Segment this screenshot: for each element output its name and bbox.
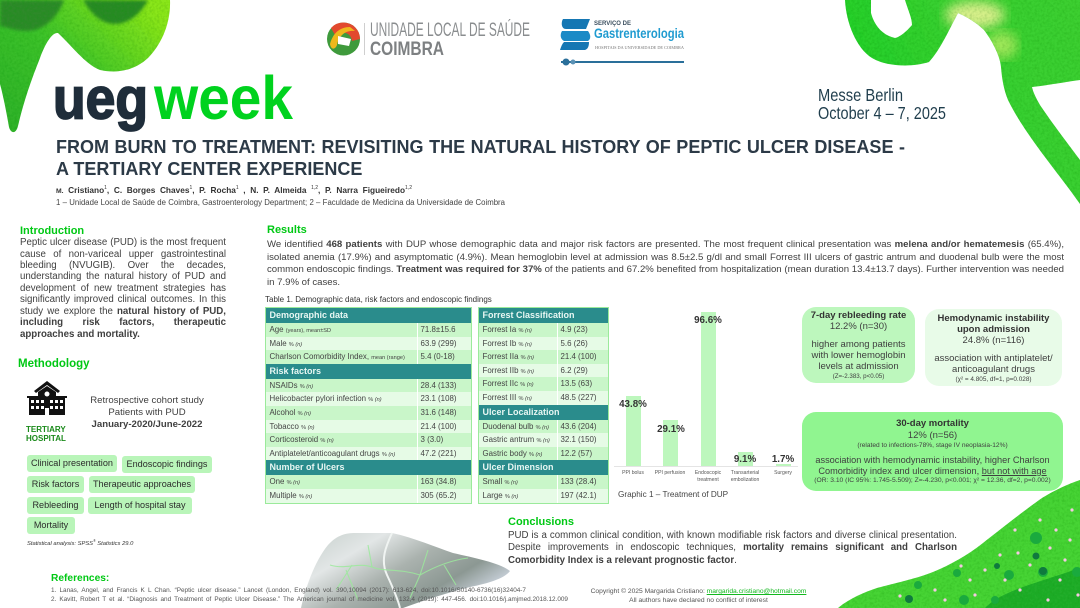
table: demographics, risk factors, number of ulcers: Multiple % (n) xyxy=(270,491,312,500)
table: forrest classification, ulcer localization, ulcer dimension: Forrest Classification xyxy=(482,310,575,320)
table: demographics, risk factors, number of ulcers: Antiplatelet/anticoagulant drugs % (n) xyxy=(270,449,395,458)
text: tertiary hospital xyxy=(26,425,66,443)
text: introduction body: cause of non-variceal upper gastrointestinal xyxy=(20,249,226,260)
axis labels: Transarterial xyxy=(731,470,759,476)
logo: Unidade Local de Saúde Coimbra: COIMBRA xyxy=(370,38,444,60)
text: introduction body: approaches and mortality. xyxy=(20,329,140,340)
axis labels xyxy=(622,470,792,483)
variable tags xyxy=(27,455,212,534)
value labels: 43.8% xyxy=(619,399,647,410)
axis labels: Endoscopic xyxy=(695,470,721,476)
text: study design: Patients with PUD xyxy=(108,407,186,418)
table: demographics, risk factors, number of ulcers: Male % (n) xyxy=(270,339,302,348)
table: demographics, risk factors, number of ulcers: 63.9 (299) xyxy=(420,339,456,348)
table: demographics, risk factors, number of ulcers: 21.4 (100) xyxy=(420,422,456,431)
venue and date xyxy=(818,85,946,123)
table: demographics, risk factors, number of ulcers: 305 (65.2) xyxy=(420,491,456,500)
decorative artwork: bottom-right green tissue xyxy=(838,480,1080,608)
table: forrest classification, ulcer localization, ulcer dimension: Forrest IIc % (n) xyxy=(482,379,534,388)
logo: ueg week: ueg xyxy=(53,66,148,132)
callout: 30-day mortality: 12% (n=56) xyxy=(908,430,957,441)
text: results body xyxy=(267,238,1064,288)
table: forrest classification, ulcer localization, ulcer dimension: Duodenal bulb % (n) xyxy=(482,422,549,431)
table: demographics, risk factors, number of ulcers: 163 (34.8) xyxy=(420,477,456,486)
callout: hemodynamic instability xyxy=(925,309,1062,386)
heading: conclusions: Conclusions xyxy=(508,516,574,528)
variable tags: Mortality xyxy=(34,520,68,530)
callout: 7-day rebleeding rate xyxy=(802,307,915,383)
text: statistical analysis: Statistical analysis: SPSS® Statistics 29.0 xyxy=(27,539,133,547)
table: demographics, risk factors, number of ulcers: 71.8±15.6 xyxy=(420,325,456,334)
table: demographics, risk factors, number of ulcers: 47.2 (221) xyxy=(420,449,456,458)
bar: PPI bolus xyxy=(626,396,640,466)
text: introduction body: understanding the natural history of PUD and xyxy=(20,271,226,282)
table: forrest classification, ulcer localization, ulcer dimension: Forrest IIa % (n) xyxy=(482,352,534,361)
table: forrest classification, ulcer localization, ulcer dimension: 197 (42.1) xyxy=(560,491,596,500)
table: demographics, risk factors, number of ulcers: Number of Ulcers xyxy=(270,462,345,472)
logo: ueg week xyxy=(53,66,293,132)
callout: 30-day mortality: association with hemodynamic instability, higher Charlson xyxy=(815,455,1050,465)
table: forrest classification, ulcer localization, ulcer dimension: 43.6 (204) xyxy=(560,422,596,431)
callout: 30-day mortality xyxy=(802,412,1063,491)
table: demographics, risk factors, number of ulcers: 23.1 (108) xyxy=(420,394,456,403)
axis labels: PPI perfusion xyxy=(655,470,685,476)
callout: hemodynamic instability: upon admission xyxy=(957,324,1030,335)
callout: 30-day mortality: (related to infections-78%, stage IV neoplasia-12%) xyxy=(857,442,1008,448)
table: demographics, risk factors, number of ulcers: Risk factors xyxy=(270,366,321,376)
axis labels: Surgery xyxy=(774,470,792,476)
heading: introduction: Introduction xyxy=(20,225,84,237)
table: demographics, risk factors, number of ulcers xyxy=(265,307,472,504)
text: introduction body: study we explore the natural history of PUD, xyxy=(20,306,226,317)
axis labels: treatment xyxy=(697,477,719,483)
table: forrest classification, ulcer localization, ulcer dimension: Forrest IIb % (n) xyxy=(482,366,534,375)
table: forrest classification, ulcer localization, ulcer dimension: 4.9 (23) xyxy=(560,325,588,334)
logo: Serviço de Gastrenterologia xyxy=(560,19,684,66)
text: study design: January-2020/June-2022 xyxy=(92,419,202,430)
table: demographics, risk factors, number of ulcers: Alcohol % (n) xyxy=(270,408,311,417)
table: forrest classification, ulcer localization, ulcer dimension: 6.2 (29) xyxy=(560,366,588,375)
table: demographics, risk factors, number of ulcers: One % (n) xyxy=(270,477,300,486)
bar: endoscopic treatment xyxy=(701,312,716,466)
panel: references xyxy=(51,573,568,603)
table: forrest classification, ulcer localization, ulcer dimension: 12.2 (57) xyxy=(560,449,592,458)
text: conclusions body: Comorbidity Index is a relevant prognostic factor. xyxy=(508,555,737,566)
heading: methodology: Methodology xyxy=(18,358,90,370)
decorative artwork: top-right green organ xyxy=(845,0,1080,204)
callout: 30-day mortality: (OR: 3.10 (IC 95%: 1.745-5.509); Z=-4.230, p<0.001; χ² = 12.36, df=2, p=0.002) xyxy=(814,477,1051,484)
value labels xyxy=(619,315,794,464)
value labels: 9.1% xyxy=(734,454,756,464)
copyright note: Copyright © 2025 Margarida Cristiano: margarida.cristiano@hotmail.com xyxy=(591,588,806,595)
chart: treatment of DUP xyxy=(614,312,798,499)
table: demographics, risk factors, number of ulcers: Tobacco % (n) xyxy=(270,422,314,431)
callout: hemodynamic instability: association with antiplatelet/ xyxy=(934,353,1053,364)
callout: 7-day rebleeding rate: higher among patients xyxy=(811,339,906,350)
table: forrest classification, ulcer localization, ulcer dimension: Forrest Ia % (n) xyxy=(482,325,532,334)
callout: hemodynamic instability: Hemodynamic instability xyxy=(938,313,1049,324)
text: results body: in 7.9% of cases. xyxy=(267,276,340,288)
table: forrest classification, ulcer localization, ulcer dimension: Forrest III % (n) xyxy=(482,393,532,402)
venue and date: Messe Berlin xyxy=(818,85,903,105)
affiliations: 1 – Unidade Local de Saúde de Coimbra, Gastroenterology Department; 2 – Faculdade de Medicina da Universidade de Coimbra xyxy=(56,198,505,207)
text: reference list xyxy=(51,587,568,603)
bar: PPI perfusion xyxy=(663,420,678,466)
table: forrest classification, ulcer localization, ulcer dimension: Small % (n) xyxy=(482,477,518,486)
text: conclusions body: Despite improvements in endoscopic techniques, mortality remains significant and Charlson xyxy=(508,542,957,553)
text: study design xyxy=(90,395,204,430)
decorative artwork: top-left green organ xyxy=(0,0,170,132)
logo: Serviço de Gastrenterologia: SERVIÇO DE xyxy=(594,20,632,27)
variable tags: Therapeutic approaches xyxy=(93,479,191,489)
callout: 30-day mortality: Comorbidity index and ulcer dimension, but not with age xyxy=(818,466,1047,476)
callout: 30-day mortality: 30-day mortality xyxy=(896,418,969,429)
table: forrest classification, ulcer localization, ulcer dimension: 5.6 (26) xyxy=(560,339,588,348)
value labels: 1.7% xyxy=(772,454,794,464)
text: introduction body xyxy=(20,237,226,340)
text: results body: We identified 468 patients with DUP whose demographic data and major risk factors are presented. The most frequent clinical presentation was melena and/or hematemesis (65.4%), xyxy=(267,238,1064,250)
heading: references: References: xyxy=(51,573,109,584)
table: forrest classification, ulcer localization, ulcer dimension: Ulcer Dimension xyxy=(482,462,554,472)
text: introduction body: including risk factors, therapeutic xyxy=(20,317,226,328)
table: forrest classification, ulcer localization, ulcer dimension: 21.4 (100) xyxy=(560,352,596,361)
text: introduction body: significantly improved clinical outcomes. In this xyxy=(20,294,226,305)
panel: conclusions xyxy=(508,516,957,566)
chart caption: Graphic 1 – Treatment of DUP xyxy=(618,490,728,499)
text: results body: common endoscopic findings. Treatment was required for 37% of the patients and 67.2% benefited from hospitalization (mean duration 13.4±13.7 days). Further intervention was needed xyxy=(267,264,1064,275)
callout: hemodynamic instability: 24.8% (n=116) xyxy=(963,335,1024,346)
panel: results text xyxy=(267,224,1064,288)
text: conclusions body: PUD is a common clinical condition, with known modifiable risk factors and diverse clinical presentation. xyxy=(508,530,957,541)
table: demographics, risk factors, number of ulcers: Helicobacter pylori infection % (n) xyxy=(270,394,382,403)
callout: hemodynamic instability: (χ² = 4.805, df=1, p=0.028) xyxy=(955,376,1032,383)
table: demographics, risk factors, number of ulcers: Corticosteroid % (n) xyxy=(270,435,334,444)
table: demographics, risk factors, number of ulcers: Demographic data xyxy=(270,310,348,320)
panel: methodology xyxy=(18,358,212,547)
text: introduction body: development of new treatment strategies has xyxy=(20,283,226,294)
text: conclusions body xyxy=(508,530,957,566)
table: demographics, risk factors, number of ulcers: NSAIDs % (n) xyxy=(270,381,313,390)
table: demographics, risk factors, number of ulcers: Age (years), mean±SD xyxy=(270,325,331,334)
value labels: 29.1% xyxy=(657,424,685,435)
table: demographics, risk factors, number of ulcers: 3 (3.0) xyxy=(420,435,443,444)
table: forrest classification, ulcer localization, ulcer dimension: Large % (n) xyxy=(482,491,518,500)
title: A TERTIARY CENTER EXPERIENCE xyxy=(56,159,362,179)
icon: hospital xyxy=(27,381,67,415)
title: FROM BURN TO TREATMENT: REVISITING THE NATURAL HISTORY OF PEPTIC ULCER DISEASE - xyxy=(56,137,905,157)
authors: M. Cristiano1, C. Borges Chaves1, P. Rocha1 , N. P. Almeida 1,2, P. Narra Figueiredo1,2 xyxy=(56,185,412,195)
axis labels: PPI bolus xyxy=(622,470,644,476)
text: reference list: 2. Kavitt, Robert T et al. “Diagnosis and Treatment of Peptic Ulcer Disease.” The American journal of medicine vol. 132,4 (2019): 447-456. doi:10.1016/j.amjmed.2018.12.009 xyxy=(51,596,568,603)
table: forrest classification, ulcer localization, ulcer dimension xyxy=(478,307,609,504)
table: forrest classification, ulcer localization, ulcer dimension: Gastric body % (n) xyxy=(482,449,542,458)
text: reference list: 1. Lanas, Angel, and Francis K L Chan. “Peptic ulcer disease.” Lancet (London, England) vol. 390,10094 (2017): 613-624, doi:10.1016/S0140-6736(16)32404-7 xyxy=(51,587,526,594)
logo: Unidade Local de Saúde Coimbra xyxy=(327,19,530,60)
callout: 7-day rebleeding rate: 7-day rebleeding rate xyxy=(811,310,906,321)
table: forrest classification, ulcer localization, ulcer dimension: 13.5 (63) xyxy=(560,379,592,388)
text: introduction body: bleeding (NVUGIB). Over the decades, xyxy=(20,260,226,271)
table: demographics, risk factors, number of ulcers: Charlson Comorbidity Index, mean (range) xyxy=(270,352,405,361)
copyright note xyxy=(591,588,806,604)
bar: surgery xyxy=(776,464,790,466)
bar: transarterial embolization xyxy=(738,452,752,466)
decorative artwork: liver xyxy=(301,532,510,608)
text: results body: isolated anemia (17.9%) and asymptomatic (4.9%). Mean hemoglobin level at admission was 8.5±2.5 g/dl and small Forrest III ulcers of gastric antrum and duodenal bulb were the most xyxy=(267,252,1064,262)
callout: 7-day rebleeding rate: 12.2% (n=30) xyxy=(830,321,887,332)
table: forrest classification, ulcer localization, ulcer dimension: Forrest Ib % (n) xyxy=(482,339,532,348)
text: study design: Retrospective cohort study xyxy=(90,395,204,406)
variable tags: Clinical presentation xyxy=(31,458,113,468)
table: forrest classification, ulcer localization, ulcer dimension: 48.5 (227) xyxy=(560,393,596,402)
callout: 7-day rebleeding rate: (Z=-2.383, p<0.05) xyxy=(833,373,884,380)
heading: results: Results xyxy=(267,224,307,236)
table: forrest classification, ulcer localization, ulcer dimension: 133 (28.4) xyxy=(560,477,596,486)
table: demographics, risk factors, number of ulcers: 31.6 (148) xyxy=(420,408,456,417)
variable tags: Risk factors xyxy=(32,479,79,489)
callout: 7-day rebleeding rate: levels at admission xyxy=(818,361,899,372)
callout: hemodynamic instability: anticoagulant drugs xyxy=(952,364,1035,375)
logo: Serviço de Gastrenterologia: HOSPITAIS DA UNIVERSIDADE DE COIMBRA xyxy=(595,46,684,50)
table: forrest classification, ulcer localization, ulcer dimension: Gastric antrum % (n) xyxy=(482,435,550,444)
callout: 7-day rebleeding rate: with lower hemoglobin xyxy=(812,350,906,361)
variable tags: Endoscopic findings xyxy=(127,459,207,469)
panel: introduction xyxy=(20,225,226,340)
text: tertiary hospital: TERTIARY xyxy=(26,425,66,434)
text: introduction body: Peptic ulcer disease (PUD) is the most frequent xyxy=(20,237,226,248)
table: demographics, risk factors, number of ulcers: 28.4 (133) xyxy=(420,381,456,390)
table: forrest classification, ulcer localization, ulcer dimension: Ulcer Localization xyxy=(482,407,560,417)
table: demographics, risk factors, number of ulcers: 5.4 (0-18) xyxy=(420,352,455,361)
variable tags: Length of hospital stay xyxy=(94,500,186,510)
table caption: Table 1. Demographic data, risk factors and endoscopic findings xyxy=(265,295,492,304)
table: forrest classification, ulcer localization, ulcer dimension: 32.1 (150) xyxy=(560,435,596,444)
value labels: 96.6% xyxy=(694,315,722,326)
variable tags: Rebleeding xyxy=(32,500,78,510)
copyright note: All authors have declared no conflict of interest xyxy=(629,597,768,604)
text: tertiary hospital: HOSPITAL xyxy=(26,434,66,443)
axis labels: embolization xyxy=(731,477,759,483)
title xyxy=(56,137,905,179)
